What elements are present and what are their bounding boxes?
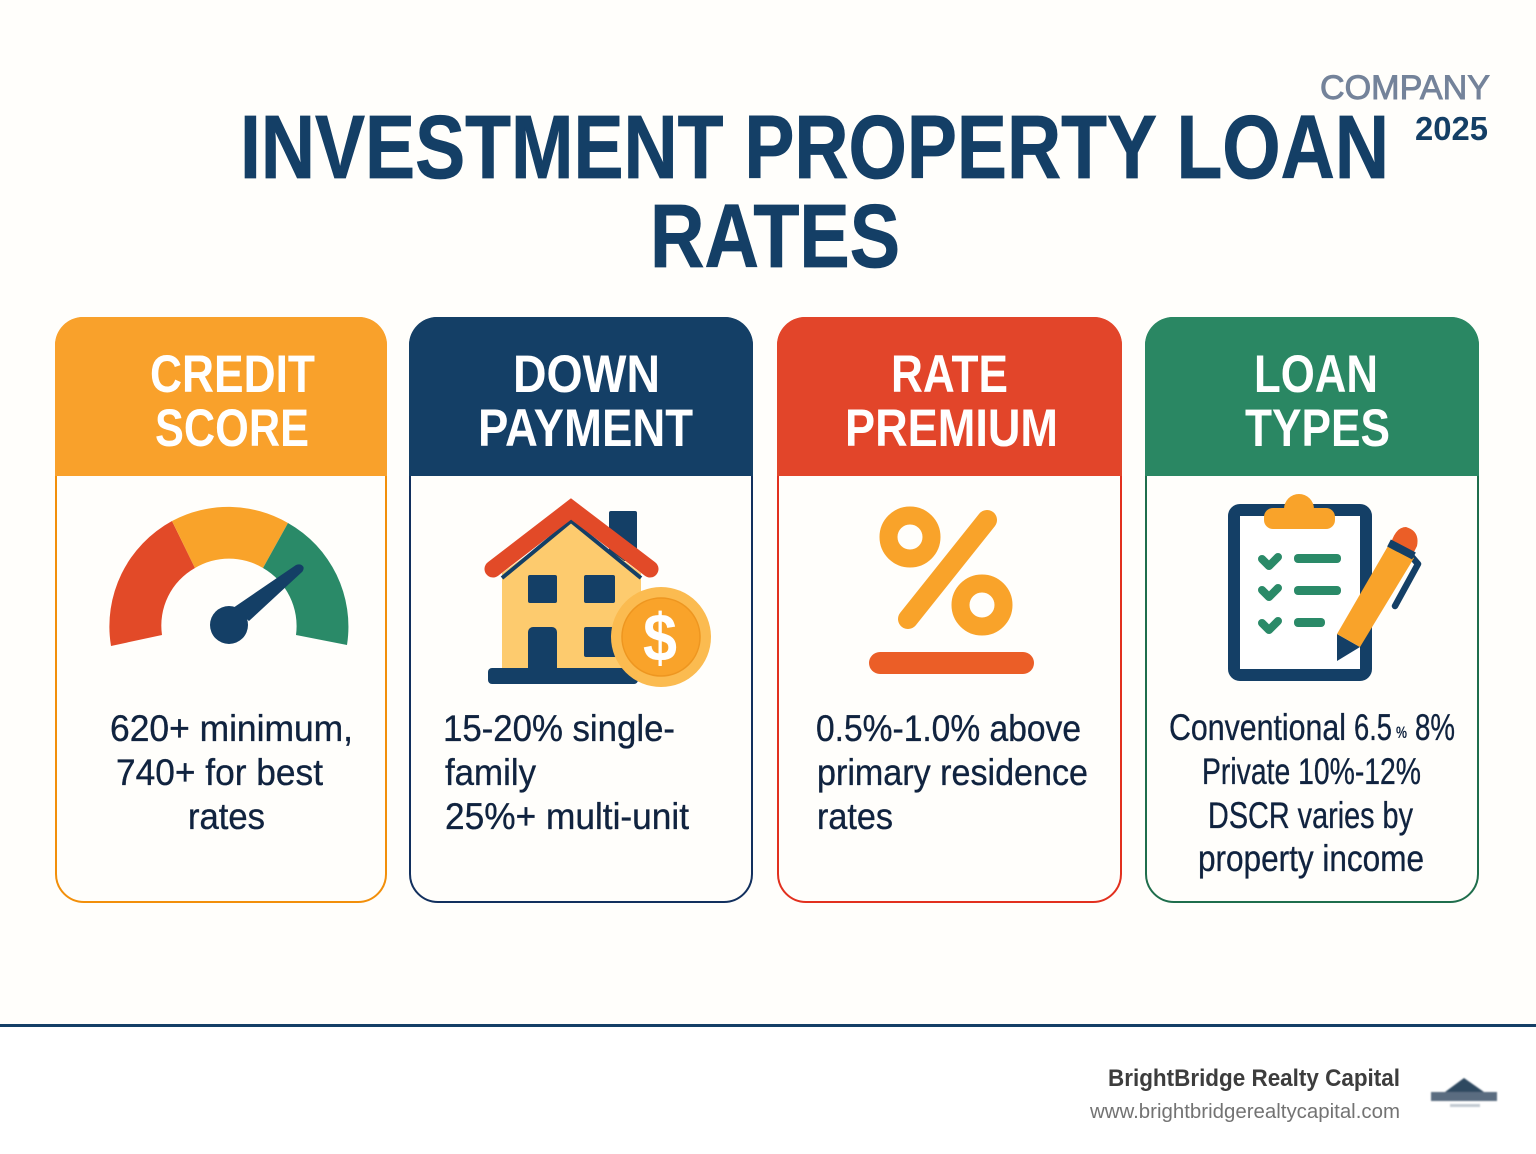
- icon: house with coin: $: [643, 600, 677, 676]
- loan types text: %: [1396, 723, 1407, 742]
- loan types header: LOAN: [1254, 345, 1378, 404]
- loan types text: property income: [1198, 838, 1424, 879]
- company label: COMPANY: [1320, 69, 1490, 107]
- down payment text: 15-20% single-: [443, 708, 675, 749]
- down payment header: [409, 317, 753, 476]
- credit score header: CREDIT: [150, 345, 315, 404]
- credit score header: SCORE: [155, 399, 309, 458]
- panel: rate premium: [777, 317, 1122, 902]
- rate premium text: rates: [817, 796, 893, 837]
- icon: clipboard and pencil: [1234, 494, 1418, 675]
- year: 2025: [1415, 110, 1488, 147]
- title: RATES: [650, 187, 900, 287]
- rate premium header: [777, 317, 1122, 476]
- loan types text: [1169, 707, 1455, 879]
- down payment header: DOWN: [513, 345, 660, 404]
- loan types text: 6.5: [1354, 707, 1392, 748]
- down payment text: [443, 708, 690, 837]
- panel: loan types: [1145, 317, 1479, 902]
- loan types text: Private 10%-12%: [1202, 751, 1421, 792]
- rate premium text: [816, 708, 1088, 837]
- loan types header: TYPES: [1245, 399, 1390, 458]
- icon: house with coin: [488, 509, 711, 687]
- panel: credit score: [55, 317, 387, 902]
- rate premium text: primary residence: [817, 752, 1088, 793]
- panel: down payment: [409, 317, 753, 902]
- loan types text: 8%: [1415, 707, 1455, 748]
- credit score text: [110, 708, 353, 837]
- footer: [0, 1024, 1536, 1154]
- loan types text: Conventional: [1169, 707, 1346, 748]
- loan types text: DSCR varies by: [1208, 795, 1413, 836]
- company name: BrightBridge Realty Capital: [1108, 1065, 1400, 1092]
- logo: [1431, 1078, 1497, 1107]
- loan types header: [1145, 317, 1479, 476]
- down payment text: 25%+ multi-unit: [445, 796, 690, 837]
- title: [240, 98, 1389, 287]
- rate premium text: 0.5%-1.0% above: [816, 708, 1081, 749]
- credit score header: [55, 317, 387, 476]
- credit score text: rates: [188, 796, 265, 837]
- icon: gauge: [109, 507, 348, 646]
- rate premium header: PREMIUM: [845, 399, 1058, 458]
- website: www.brightbridgerealtycapital.com: [1089, 1101, 1400, 1123]
- icon: percent sign: [869, 516, 1034, 674]
- credit score text: 740+ for best: [116, 752, 324, 793]
- rate premium header: RATE: [891, 345, 1008, 404]
- down payment text: family: [445, 752, 536, 793]
- credit score text: 620+ minimum,: [110, 708, 353, 749]
- down payment header: PAYMENT: [478, 399, 693, 458]
